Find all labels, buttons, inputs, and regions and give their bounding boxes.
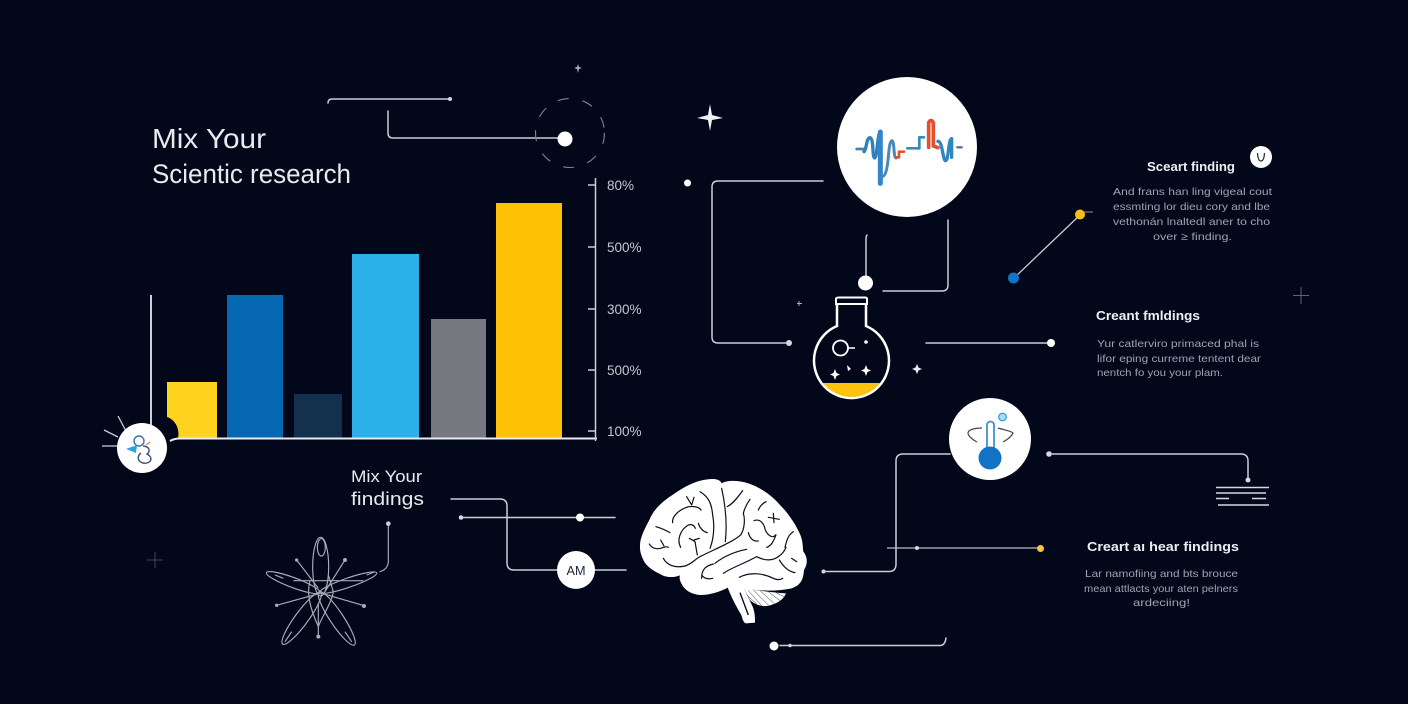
text block: mix your findings: Mix Your: [351, 467, 422, 486]
connector: waveform to flask: [712, 181, 823, 346]
icon: thermometer badge: [949, 398, 1031, 480]
text block: create a hear findings: ardeciing!: [1133, 597, 1190, 609]
icon: brain: [640, 479, 807, 623]
text block: create a hear findings: Creart aı hear findings: [1087, 539, 1239, 554]
bar: amber: [496, 203, 562, 438]
chart axes: [151, 178, 597, 441]
bar: gray: [431, 319, 486, 438]
title: Mix Your: [152, 123, 266, 154]
connectors: AM node: AM: [566, 563, 586, 578]
connector: brain to thermometer: [822, 454, 950, 574]
icon: stacked lines: [1216, 488, 1269, 505]
connector: top dashed orbit node: [328, 97, 604, 168]
title: Scientic research: [152, 159, 351, 189]
connector: thermometer to lines: [1046, 451, 1250, 482]
text block: created findings: [1096, 308, 1262, 379]
dot marker: [684, 180, 691, 186]
icon: small badge: [1250, 146, 1272, 168]
small stars: [147, 64, 1309, 568]
connector: yellow dot: [887, 545, 1044, 552]
text block: search finding: over ≥ finding.: [1153, 231, 1232, 243]
axis labels: 500%: [607, 240, 642, 255]
icon: people badge: [102, 416, 167, 473]
connector: flask to created findings: [926, 339, 1055, 347]
text block: created findings: Creant fmldings: [1096, 308, 1200, 323]
text block: search finding: vethonán lnaltedl aner to cho: [1113, 216, 1270, 228]
text block: created findings: Yur catlerviro primaced phal is: [1097, 338, 1259, 350]
text block: create a hear findings: [1084, 539, 1239, 609]
text block: search finding: essmting lor dieu cory and lbe: [1113, 201, 1270, 213]
bar: blue: [227, 295, 283, 438]
bar: light blue: [352, 254, 419, 438]
bar: navy: [294, 394, 342, 438]
axis labels: [607, 178, 642, 439]
text block: mix your findings: findings: [351, 489, 424, 509]
icon: flask: [814, 298, 889, 398]
text block: created findings: nentch fo you your plam.: [1097, 367, 1223, 379]
text block: created findings: lifor eping curreme tentent dear: [1097, 353, 1262, 365]
text block: search finding: Sceart finding: [1147, 159, 1235, 174]
axis labels: 100%: [607, 424, 642, 439]
connector: bottom line: [770, 638, 946, 650]
connectors: AM node: [451, 499, 626, 589]
title: [152, 123, 351, 189]
waveform circle: [837, 77, 977, 217]
connector: flask node: [858, 220, 948, 291]
icon: star molecule: [265, 521, 391, 649]
text block: search finding: And frans han ling vigeal cout: [1113, 186, 1272, 198]
text block: mix your findings: [351, 467, 424, 509]
diagonal connector: [1008, 210, 1093, 284]
axis labels: 300%: [607, 302, 642, 317]
axis labels: 80%: [607, 178, 634, 193]
text block: search finding: [1113, 159, 1272, 243]
icon: large sparkle: [697, 104, 723, 131]
axis labels: 500%: [607, 363, 642, 378]
bar chart: [151, 178, 642, 441]
text block: create a hear findings: mean attlacts your aten pelners: [1084, 583, 1238, 595]
text block: create a hear findings: Lar namofiing and bts brouce: [1085, 568, 1238, 580]
bar: yellow: [167, 382, 217, 438]
